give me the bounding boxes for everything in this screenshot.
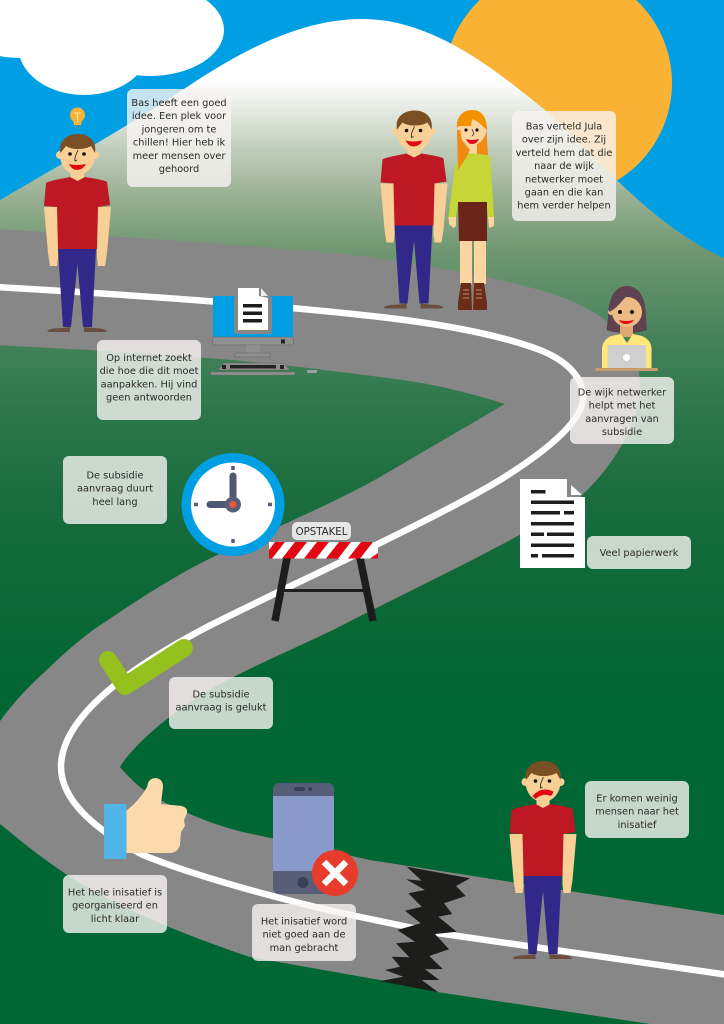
callout: goed idee: jongeren om te [141,124,216,135]
callout: goed idee: Bas heeft een goed [131,98,227,109]
callout: weinig mensen: inisatief [618,820,657,831]
callout: veel papierwerk: Veel papierwerk [600,548,679,559]
character: wijk netwerker [595,286,658,371]
callout: aanvraag gelukt: aanvraag is gelukt [175,703,267,714]
icon: roadblock barrier [269,522,378,621]
callout: aanvraag duurt lang: De subsidie [86,470,144,482]
callout: goed idee [127,89,231,187]
callout: goed idee: chillen! Hier heb ik [133,138,225,149]
callout: niet goed gebracht: man gebracht [270,943,339,954]
callout: goed idee: idee. Een plek voor [132,111,227,122]
callout: goed idee: meer mensen over [133,151,226,162]
callout: georganiseerd: georganiseerd en [72,901,158,912]
callout: weinig mensen: mensen naar het [595,807,679,818]
callout: aanvraag duurt lang: heel lang [92,497,138,508]
callout: niet goed gebracht: niet goed aan de [262,930,346,941]
callout: weinig mensen [585,781,689,838]
callout: internet zoeken: Op internet zoekt [106,353,192,364]
callout: georganiseerd: Het hele inisatief is [68,888,162,898]
character: Bas with idea [44,134,111,332]
winding road [0,229,724,1024]
callout: georganiseerd [63,875,167,933]
callout: Bas vertelt Jula: hem verder helpen [517,201,611,212]
callout: wijk netwerker helpt [570,377,674,444]
callout: internet zoeken [97,340,201,420]
callout: weinig mensen: Er komen weinig [596,794,678,804]
callout: internet zoeken: aanpakken. Hij vind [101,379,197,390]
crack in the road [380,867,470,992]
callout: wijk netwerker helpt: helpt met het [589,401,656,412]
callout: Bas vertelt Jula: over zijn idee. Zij [522,135,606,146]
sun [444,0,672,197]
icon: computer [211,288,317,375]
icon: clock [182,453,284,556]
callout: veel papierwerk [587,536,691,569]
callout: goed idee: gehoord [159,164,199,175]
cloud [0,0,224,95]
callout: aanvraag duurt lang: aanvraag duurt [77,484,153,495]
callout: Bas vertelt Jula: verteld hem dat die [516,148,612,159]
character: Jula [448,110,494,310]
callout: aanvraag gelukt: De subsidie [192,690,250,700]
callout: wijk netwerker helpt: De wijk netwerker [578,388,667,398]
icon: green check mark [108,648,184,686]
icon: thumbs up [104,778,187,859]
icon: roadblock barrier: OPSTAKEL [296,527,348,538]
callout: georganiseerd: licht klaar [91,914,140,925]
callout: internet zoeken: geen antwoorden [106,393,192,404]
character: Bas talking to Jula [380,110,448,308]
callout: wijk netwerker helpt: aanvragen van [585,414,659,425]
callout: niet goed gebracht [252,904,356,961]
callout: aanvraag gelukt [169,677,273,729]
callout: wijk netwerker helpt: subsidie [602,427,642,438]
callout: Bas vertelt Jula: gaan en die kan [525,188,603,198]
icon: phone with red cross [273,783,358,896]
callout: Bas vertelt Jula [512,111,616,221]
callout: internet zoeken: die hoe die dit moet [100,366,199,377]
callout: Bas vertelt Jula: Bas verteld Jula [526,122,602,132]
callout: niet goed gebracht: Het inisatief word [261,916,347,928]
icon: paperwork document [520,479,585,568]
callout: aanvraag duurt lang [63,456,167,524]
icon: light bulb [70,108,85,128]
callout: Bas vertelt Jula: naar de wijk [534,161,594,172]
character: disappointed Bas [510,761,576,959]
callout: Bas vertelt Jula: netwerker moet [525,174,603,185]
